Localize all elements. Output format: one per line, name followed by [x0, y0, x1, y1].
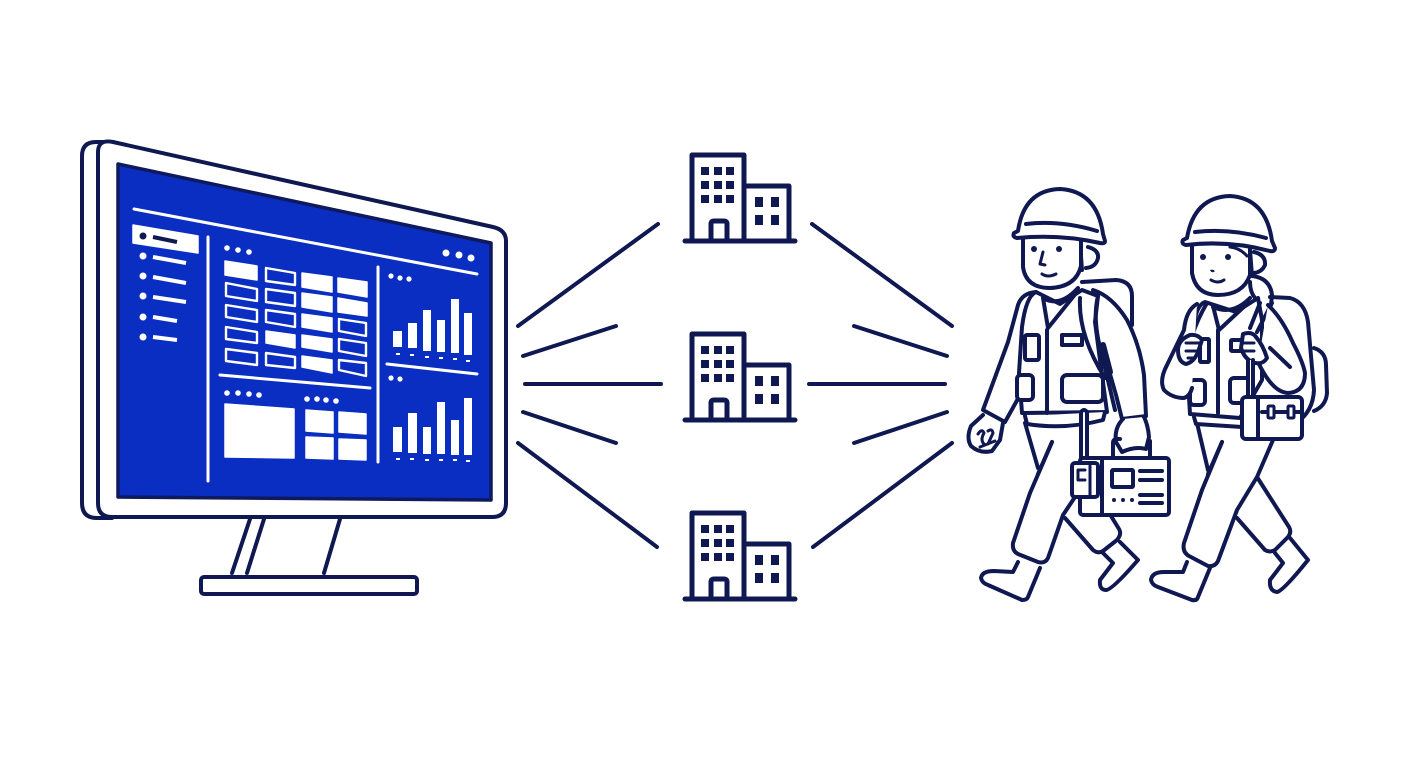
dashboard screen [118, 164, 491, 500]
head and helmet [1182, 196, 1275, 295]
status dots [224, 245, 474, 404]
left arm [983, 292, 1036, 422]
radio antenna [1081, 410, 1087, 463]
worker: man with helmet and toolcase [968, 189, 1169, 600]
bar chart: upper [393, 299, 472, 362]
toolcase [1080, 439, 1169, 515]
vest pockets [1190, 378, 1252, 405]
back leg and boot [1065, 490, 1138, 590]
monitor back edge [82, 142, 113, 518]
sidebar menu [133, 225, 198, 340]
summary tiles [225, 404, 366, 460]
worker: woman with helmet and shoulder bag [1151, 196, 1327, 600]
icon: office building middle [685, 334, 795, 420]
shoulder bag [1242, 397, 1302, 439]
back leg and boot [1237, 477, 1308, 592]
torso vest [1188, 298, 1272, 427]
radio handset [1072, 463, 1098, 497]
monitor bezel [98, 141, 506, 517]
monitor stand [201, 519, 417, 594]
connector lines: monitor to buildings [518, 224, 661, 547]
ponytail [1250, 276, 1272, 305]
connector lines: buildings to workers [809, 224, 952, 547]
arm [1162, 304, 1305, 398]
icon: office building top [685, 155, 795, 241]
vest pockets [1017, 335, 1103, 402]
icon: computer monitor [82, 141, 506, 594]
gripping hands [1178, 333, 1267, 364]
screen header rule [134, 209, 477, 274]
front leg and boot [981, 423, 1075, 600]
icon: office building bottom [685, 513, 795, 599]
right arm [1093, 290, 1146, 419]
hand gripping case [1116, 417, 1149, 452]
left hand [968, 415, 1003, 452]
backpack [1082, 280, 1132, 325]
torso vest [1017, 288, 1115, 426]
head and helmet [1013, 189, 1105, 288]
screen column dividers [208, 237, 477, 481]
bar chart: lower [393, 398, 472, 462]
data table [225, 261, 367, 376]
backpack and side pocket [1270, 297, 1327, 423]
bag strap [1248, 360, 1253, 408]
front leg and boot [1151, 423, 1273, 600]
